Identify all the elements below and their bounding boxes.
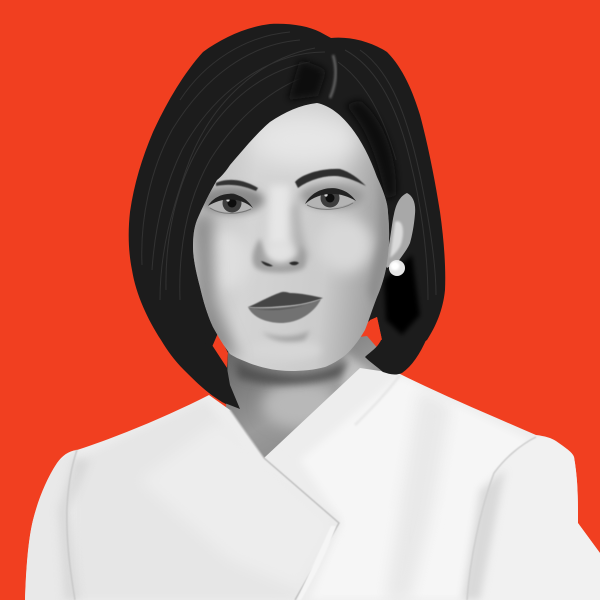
face bbox=[193, 103, 395, 371]
nose bbox=[253, 238, 306, 272]
lips bbox=[248, 292, 323, 323]
right armhole seam bbox=[467, 437, 536, 600]
left armhole seam bbox=[67, 450, 77, 600]
hair bbox=[129, 24, 445, 409]
right eyebrow bbox=[295, 169, 366, 188]
sleeve right bbox=[548, 438, 600, 553]
parting highlight bbox=[330, 55, 336, 98]
neck bbox=[226, 336, 400, 458]
lapel edge highlight bbox=[297, 526, 336, 600]
eye socket shadows bbox=[200, 186, 264, 214]
hair strands bbox=[142, 32, 436, 300]
earring bbox=[389, 260, 405, 276]
left eyebrow bbox=[216, 180, 258, 191]
red gap right of neck bbox=[365, 317, 382, 340]
edge shadows bbox=[193, 210, 240, 360]
right panel light bbox=[300, 375, 530, 600]
jacket bbox=[25, 368, 600, 600]
ear bbox=[385, 193, 415, 268]
red gap left of neck bbox=[212, 333, 228, 368]
left eye bbox=[208, 194, 253, 213]
collar fold bbox=[355, 375, 400, 425]
sleeve left bbox=[25, 465, 56, 598]
dark hair shadows bbox=[345, 100, 396, 200]
lapel edge bbox=[230, 410, 339, 600]
left hair tip over neck bbox=[190, 340, 240, 409]
right eye bbox=[305, 188, 356, 209]
left lapel panel shade bbox=[132, 399, 201, 430]
right hair tip over jacket bbox=[365, 338, 427, 375]
